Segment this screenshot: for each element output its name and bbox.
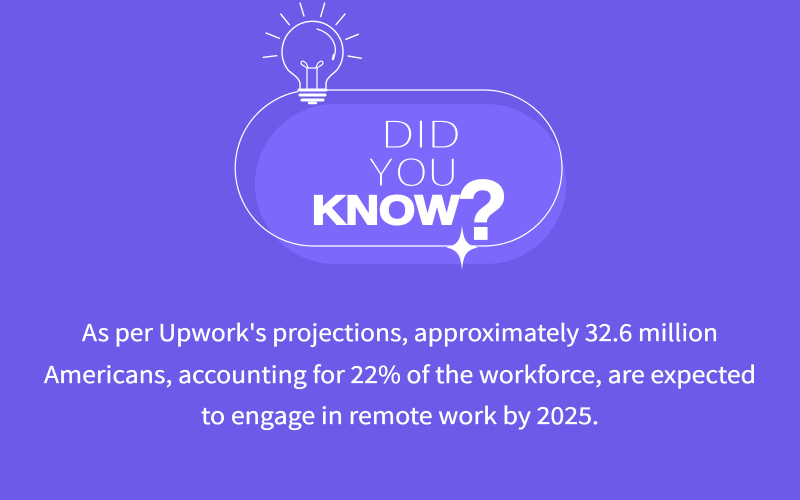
filled pill [255,104,566,264]
bulb base [299,90,326,100]
heading: you: YOU [367,148,458,196]
filament [301,61,323,88]
bulb glass [282,21,343,88]
rays [263,3,361,58]
heading: know: KNOW [312,187,459,233]
icon: light bulb [263,3,361,103]
badge: did you know [235,90,566,270]
glass highlight [317,29,335,54]
question mark: ? [457,163,508,257]
line 1: As per Upwork's projections, approximately 32.6 million [82,314,718,348]
line 3: to engage in remote work by 2025. [201,397,599,431]
body text [44,314,756,431]
heading: did: DID [381,110,461,158]
icon: sparkle [446,225,478,270]
outline pill [235,90,562,246]
line 2: Americans, accounting for 22% of the workforce, are expected [44,356,756,390]
